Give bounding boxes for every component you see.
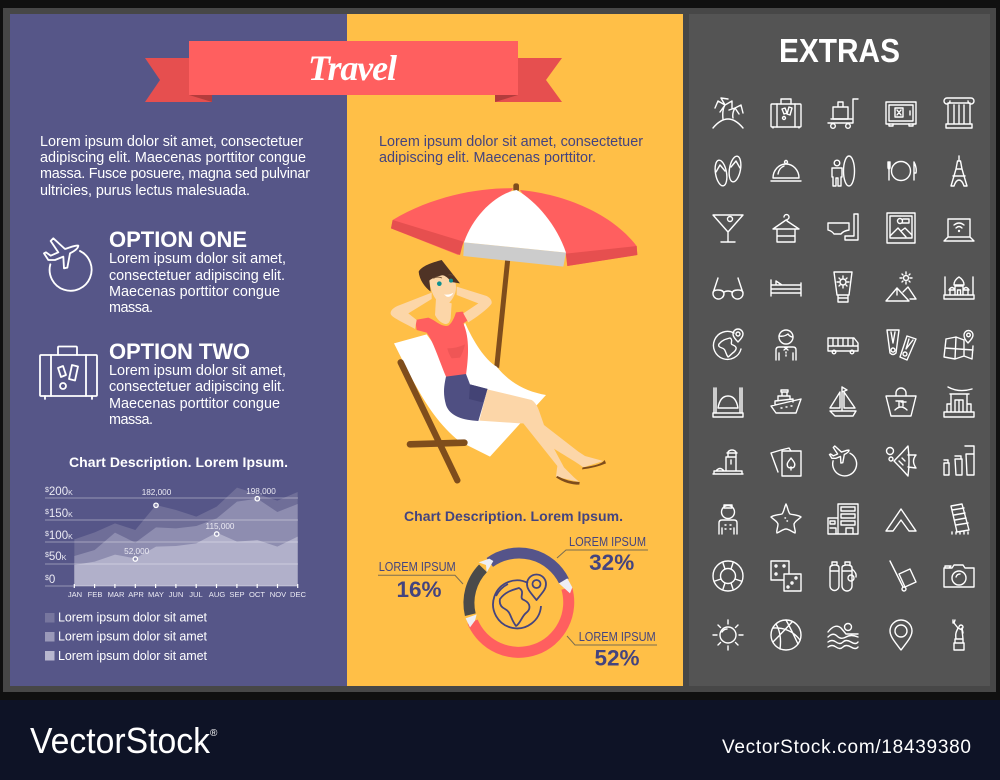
icon: map pin	[890, 620, 912, 650]
heading: extras: EXTRAS	[779, 32, 900, 69]
x axis labels: JAN	[68, 590, 82, 599]
text block: intro: adipiscing elit. Maecenas porttitor congue	[40, 150, 306, 166]
icon: lifebuoy	[713, 561, 743, 591]
text block: option one: massa.	[109, 300, 153, 316]
data values: 115,000	[206, 522, 235, 531]
x axis labels: JUL	[189, 590, 203, 599]
icon: bed	[771, 280, 801, 296]
icon: sun	[713, 620, 743, 650]
y axis labels: 100	[49, 530, 68, 542]
icon: food cloche	[771, 160, 801, 181]
text block: intro: ultricies, purus lectus malesuada.	[40, 183, 250, 199]
icon: safe	[886, 102, 916, 126]
x axis labels: AUG	[209, 590, 225, 599]
heading: area chart: Chart Description. Lorem Ipsum.	[69, 454, 288, 470]
callout: 16%	[378, 560, 463, 602]
icon: beach ball	[771, 620, 801, 650]
x axis labels	[68, 590, 307, 599]
icon: framed photo	[887, 213, 915, 243]
x axis labels: APR	[128, 590, 144, 599]
text block: intro	[40, 134, 310, 199]
callout: 32%: LOREM IPSUM	[569, 535, 646, 549]
x axis labels: MAY	[148, 590, 164, 599]
text block: center intro: Lorem ipsum dolor sit amet, consectetuer	[379, 134, 643, 150]
icon: torii gate	[944, 387, 974, 417]
data values	[124, 487, 276, 556]
donut chart	[466, 553, 572, 652]
text block: option two: massa.	[109, 412, 153, 428]
callout: 16%: LOREM IPSUM	[379, 560, 456, 574]
text block: center intro	[379, 134, 643, 166]
x axis labels: SEP	[229, 590, 245, 599]
icon: hotel building	[828, 504, 858, 534]
icon: globe with pin	[713, 329, 743, 359]
text block: center intro: adipiscing elit. Maecenas porttitor.	[379, 150, 596, 166]
y axis labels: 0	[49, 574, 55, 586]
y axis labels: 50	[49, 551, 62, 563]
heading: option two: OPTION TWO	[109, 339, 250, 364]
icon: scuba tanks	[830, 562, 856, 591]
callout: 52%: 52%	[594, 646, 640, 671]
footer bar	[0, 700, 1000, 780]
icon: camera	[944, 565, 974, 587]
callout: 52%: LOREM IPSUM	[579, 630, 656, 644]
text block: option two: Lorem ipsum dolor sit amet,	[109, 363, 286, 379]
text block: option two: consectetuer adipiscing elit.	[109, 379, 285, 395]
icon: moai statues	[944, 446, 974, 475]
title ribbon: Travel	[308, 48, 397, 88]
y axis labels: K	[68, 534, 73, 541]
icon: starfish	[771, 504, 801, 533]
icon: bus	[828, 338, 858, 354]
y axis labels: K	[68, 512, 73, 519]
icon: laptop with wifi	[944, 219, 974, 241]
icon: greek column	[944, 98, 974, 128]
panel: extras	[689, 14, 990, 686]
data values: 182,000	[142, 488, 172, 497]
icon: taj mahal	[944, 277, 974, 299]
icon: sailboat	[830, 387, 856, 416]
icon: beach bag	[886, 388, 916, 416]
callout: 32%	[557, 535, 648, 575]
y axis labels: $	[45, 575, 49, 582]
icon: tent	[886, 509, 916, 531]
shirt	[415, 312, 468, 377]
text block: intro: Lorem ipsum dolor sit amet, consectetuer	[40, 134, 303, 150]
y axis labels: $	[45, 509, 49, 516]
icon: flip-flops	[713, 155, 743, 187]
icon: statue of liberty	[953, 620, 964, 650]
x axis labels: OCT	[249, 590, 265, 599]
title ribbon	[145, 41, 562, 102]
footer bar: ®	[210, 728, 218, 739]
text block: option one: Lorem ipsum dolor sit amet,	[109, 251, 286, 267]
icon: plane and globe	[44, 238, 92, 291]
footer bar: VectorStock.com/18439380	[722, 737, 971, 758]
panel: purple left	[10, 14, 347, 686]
icon: tropical fish	[886, 446, 916, 476]
icon: luggage cart	[828, 99, 858, 128]
head and arms	[391, 260, 492, 329]
callout: 32%: 32%	[589, 550, 634, 575]
icon: snorkel mask	[828, 214, 858, 240]
chart legend: Lorem ipsum dolor sit amet	[58, 610, 208, 624]
chart legend	[45, 610, 208, 663]
icon: hotel reception	[713, 450, 743, 474]
y axis labels: 150	[49, 508, 68, 520]
chart legend: Lorem ipsum dolor sit amet	[58, 649, 208, 663]
icon: bellboy	[719, 505, 737, 534]
data markers	[133, 496, 260, 561]
area chart	[45, 486, 307, 599]
icon: martini	[713, 215, 743, 242]
x axis labels: FEB	[88, 590, 102, 599]
x axis labels: DEC	[290, 590, 307, 599]
y axis labels: $	[45, 552, 49, 559]
callout: 16%: 16%	[396, 577, 442, 602]
icon: domed palace	[713, 388, 743, 417]
text block: option one: consectetuer adipiscing elit.	[109, 268, 285, 284]
icon: cruise ship	[771, 390, 801, 413]
icon: plane and globe	[829, 446, 857, 476]
icon: plate and cutlery	[888, 162, 916, 180]
data values: 198,000	[246, 487, 276, 496]
x axis labels: MAR	[108, 590, 125, 599]
icon: diving fins	[887, 330, 916, 360]
icon: pyramids and sun	[886, 272, 916, 301]
illustration: woman under beach umbrella	[391, 183, 637, 485]
icon: dice	[771, 561, 801, 591]
icon: globe with pin	[493, 574, 546, 628]
y axis labels: K	[62, 555, 67, 562]
chart legend: Lorem ipsum dolor sit amet	[58, 630, 208, 644]
y axis labels: 200	[49, 486, 68, 498]
icon: bellhop with bow tie	[776, 330, 796, 360]
y axis labels: $	[45, 487, 49, 494]
heading: donut chart: Chart Description. Lorem Ipsum.	[404, 508, 623, 524]
icon: eiffel tower	[951, 156, 967, 186]
icon: palm island	[713, 98, 743, 128]
icon: man with surfboard	[832, 156, 854, 186]
heading: option one: OPTION ONE	[109, 227, 247, 252]
y axis labels: $	[45, 531, 49, 538]
icon: suitcase	[40, 346, 97, 399]
callout: 52%	[567, 630, 657, 671]
icon: sunglasses	[713, 278, 743, 299]
legs	[479, 389, 606, 485]
text block: option one	[109, 251, 286, 316]
text block: intro: massa. Fusce posuere, magna sed pulvinar	[40, 166, 310, 182]
data values: 52,000	[124, 547, 150, 556]
icon: rolling luggage	[890, 561, 916, 591]
y axis labels: K	[68, 490, 73, 497]
icon: map with pin	[944, 330, 973, 359]
footer bar: VectorStock	[30, 720, 211, 761]
panel: yellow center	[347, 14, 683, 686]
text block: option two	[109, 363, 286, 428]
icon: swimmer	[828, 624, 858, 648]
shorts	[444, 374, 488, 421]
umbrella canopy	[391, 188, 637, 267]
text block: option two: Maecenas porttitor congue	[109, 396, 280, 412]
icon: suitcase	[771, 99, 801, 128]
umbrella pole	[497, 260, 508, 368]
deck chair	[394, 323, 546, 480]
icon: playing cards	[771, 448, 801, 476]
y axis labels	[45, 486, 73, 586]
icon: towel on hanger	[773, 215, 799, 242]
icon: sunscreen tube	[834, 272, 852, 302]
icon: leaning tower	[951, 504, 969, 534]
text block: option one: Maecenas porttitor congue	[109, 284, 280, 300]
x axis labels: JUN	[169, 590, 183, 599]
x axis labels: NOV	[270, 590, 287, 599]
